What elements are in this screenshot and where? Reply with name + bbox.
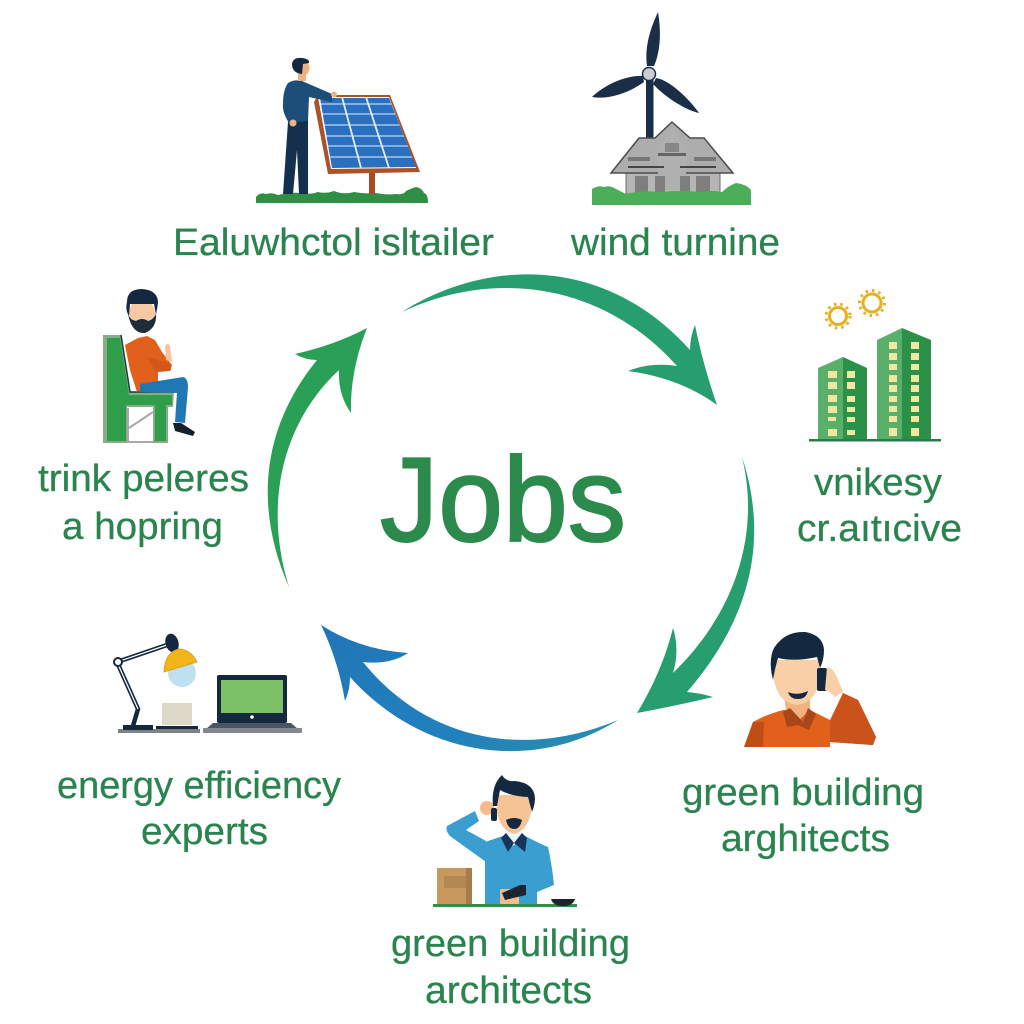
label line two: cr.aıtıcive — [797, 508, 962, 550]
label line two: experts — [141, 811, 268, 853]
label: Ealuwhctol isltailer — [173, 222, 494, 264]
panel: seated person — [38, 289, 249, 548]
panel: buildings — [797, 290, 962, 550]
panel: green building architects bottom — [391, 775, 630, 1012]
panel: solar installer — [173, 58, 494, 264]
cycle arrows — [268, 274, 754, 751]
icon: gears and green buildings — [809, 290, 941, 442]
label: energy efficiency — [57, 765, 341, 807]
label: vnikesy — [814, 462, 942, 504]
label: green building — [391, 923, 630, 965]
icon: man on chair — [103, 289, 195, 443]
icon: desk lamp and laptop — [114, 632, 302, 733]
arrow: top right — [402, 274, 717, 405]
icon: wind turbine and house — [592, 12, 751, 205]
label line two: arghitects — [721, 818, 890, 860]
icon: man on phone at desk — [433, 775, 577, 907]
arrow: left — [268, 328, 367, 587]
panel: wind turbine — [570, 12, 780, 264]
label: green building — [682, 772, 924, 814]
icon: solar panel with person — [256, 58, 428, 203]
title: Jobs: Jobs — [380, 433, 626, 567]
icon: man on phone — [744, 632, 876, 747]
panel: energy efficiency experts — [57, 632, 341, 853]
label: wind turnine — [570, 222, 780, 264]
label line two: architects — [425, 970, 592, 1012]
arrow: right — [637, 457, 754, 713]
panel: green building architects right — [682, 632, 924, 860]
arrow: bottom blue — [321, 625, 618, 751]
label: trink peleres — [38, 458, 249, 500]
label line two: a hopring — [62, 506, 223, 548]
